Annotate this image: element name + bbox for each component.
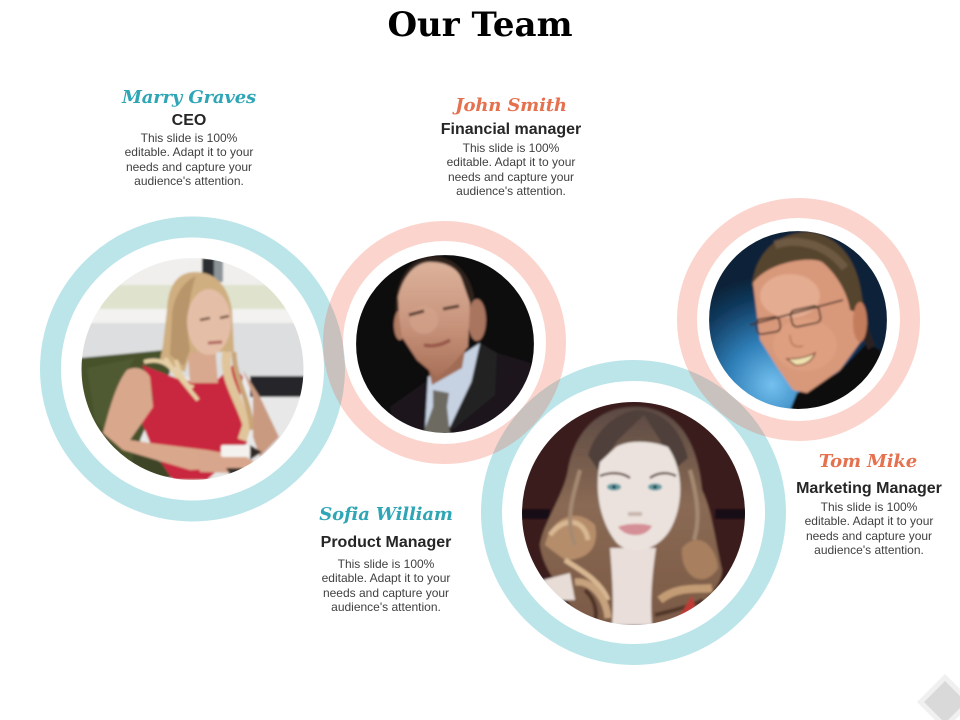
description — [125, 131, 254, 188]
text block: John Smith — [441, 94, 581, 198]
ring: John Smith — [333, 231, 556, 454]
description: editable. Adapt it to your — [805, 514, 933, 528]
name: Tom Mike: Tom Mike — [819, 450, 917, 472]
description: editable. Adapt it to your — [322, 571, 450, 585]
name: Marry Graves: Marry Graves — [122, 86, 256, 108]
role: Marketing Manager: Marketing Manager — [796, 480, 942, 497]
photo: Tom Mike — [708, 230, 890, 415]
description: This slide is 100% — [821, 500, 917, 514]
description: audience's attention. — [134, 174, 244, 188]
description: needs and capture your — [806, 529, 932, 543]
description — [322, 557, 450, 614]
description: audience's attention. — [456, 184, 566, 198]
name: Sofia William: Sofia William — [319, 504, 453, 524]
description: This slide is 100% — [463, 141, 559, 155]
text block: Tom Mike — [796, 450, 942, 557]
description — [447, 141, 576, 198]
photo: Marry Graves — [80, 257, 306, 481]
text block: Marry Graves — [122, 86, 256, 188]
description: needs and capture your — [126, 160, 252, 174]
description: audience's attention. — [331, 600, 441, 614]
circular rings and portrait photos — [40, 198, 960, 720]
ring: Tom Mike — [687, 208, 910, 431]
name: John Smith: John Smith — [455, 94, 567, 116]
role: CEO: CEO — [172, 112, 206, 129]
photo: John Smith — [355, 254, 535, 436]
title: Our Team — [387, 5, 573, 45]
icon: corner diamond — [917, 674, 960, 720]
photo: Sofia William — [520, 400, 748, 628]
description: needs and capture your — [448, 170, 574, 184]
description: needs and capture your — [323, 586, 449, 600]
description: audience's attention. — [814, 543, 924, 557]
description: editable. Adapt it to your — [125, 145, 253, 159]
ring: Marry Graves — [50, 227, 334, 511]
ring: Sofia William — [492, 370, 776, 654]
role: Product Manager: Product Manager — [321, 534, 451, 551]
text block: Sofia William — [319, 504, 453, 614]
description — [805, 500, 934, 557]
description: This slide is 100% — [141, 131, 237, 145]
description: This slide is 100% — [338, 557, 434, 571]
description: editable. Adapt it to your — [447, 155, 575, 169]
role: Financial manager: Financial manager — [441, 121, 581, 138]
